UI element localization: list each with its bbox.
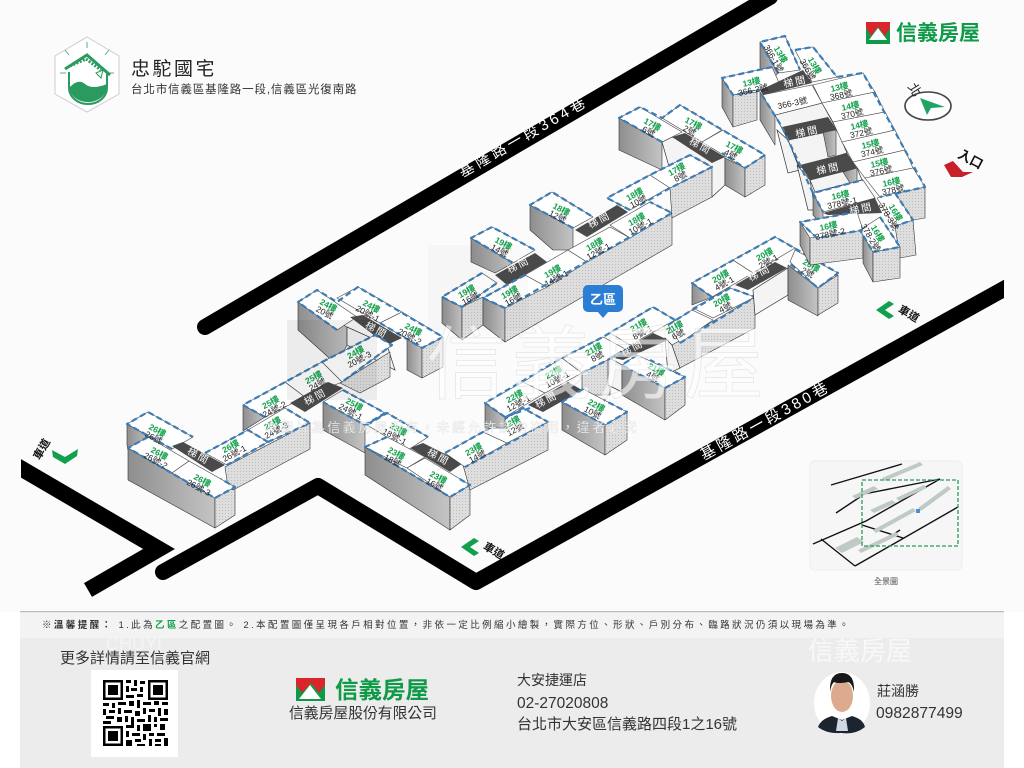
branch details: 台北市大安區信義路四段1之16號 (517, 716, 737, 733)
unit labels: 22樓 (543, 363, 564, 381)
unit labels: 378-2號 (859, 222, 883, 254)
unit labels: 24號-1 (337, 401, 365, 422)
unit labels: 16號 (424, 476, 445, 493)
unit labels: 19樓 (542, 262, 563, 280)
unit labels: 16樓 (882, 175, 902, 189)
stair labels: 梯間 (815, 160, 841, 177)
stair labels: 梯間 (425, 446, 452, 468)
unit labels: 14號-1 (543, 268, 570, 289)
QR code (91, 670, 178, 757)
branch details (517, 672, 737, 733)
project name: 忠駝國宅 (131, 58, 217, 80)
unit labels: 20樓 (711, 291, 732, 309)
stair label: 梯間 (185, 445, 212, 467)
entrance marker 入口 (944, 146, 986, 177)
footer company name: 信義房屋股份有限公司 (289, 705, 437, 722)
watermark (265, 245, 770, 435)
unit labels: 18號-1 (381, 426, 409, 447)
unit labels: 20樓 (801, 257, 822, 274)
unit labels: 15樓 (870, 156, 890, 170)
unit labels: 13樓 (742, 75, 762, 89)
unit labels: 366-3號 (777, 95, 809, 111)
stair labels: 梯間 (533, 389, 560, 411)
unit labels: 4號-1 (713, 274, 736, 293)
road: 基隆路一段364巷: 基隆路一段364巷 (456, 93, 591, 181)
icon: north compass (905, 80, 951, 120)
branch details: 大安捷運店 (517, 672, 587, 688)
unit labels: 14樓 (850, 118, 870, 132)
driveway label east (876, 301, 922, 325)
unit labels: 26號-2 (142, 450, 170, 471)
stair labels: 梯間 (586, 209, 613, 231)
unit labels: 18號 (382, 452, 403, 469)
unit labels: 2號 (799, 265, 816, 280)
unit labels (624, 115, 745, 210)
unit labels: 22樓 (504, 387, 525, 405)
unit labels: 23樓 (386, 445, 407, 462)
stair labels (533, 337, 646, 411)
icon: north compass: 北 (905, 80, 925, 99)
unit labels: 374號 (860, 145, 885, 159)
header project logo (55, 37, 119, 112)
stair label: 梯間 (746, 262, 773, 284)
agent name and phone: 莊涵勝 (877, 683, 919, 699)
footer watermark (106, 634, 912, 666)
building wing: 19 and 18 floors (442, 192, 672, 342)
unit labels: 6號 (670, 327, 687, 342)
unit labels: 368號 (829, 88, 854, 102)
unit labels: 20號-2 (396, 326, 424, 347)
footer brand logo: 信義房屋 (335, 677, 429, 703)
stair labels: 梯間 (794, 123, 820, 140)
unit labels: 2號-1 (757, 252, 780, 271)
minimap caption: 全景圖 (874, 577, 898, 586)
stair label: 梯間 (687, 135, 714, 157)
unit labels: 24樓 (403, 321, 424, 338)
unit labels: 26號-1 (221, 443, 248, 464)
building wing: 22 and 21 floors (485, 288, 755, 455)
unit labels: 21樓 (583, 340, 604, 358)
minimap (810, 461, 962, 586)
unit labels: 20樓 (754, 245, 775, 263)
unit labels: 14號 (467, 448, 488, 465)
stair labels: 梯間 (302, 386, 329, 408)
unit labels: 17樓 (642, 116, 663, 133)
building wing: 25 and 23 floors (243, 362, 548, 530)
unit labels: 378-3號 (877, 201, 901, 233)
building wing: 17 floors (607, 105, 765, 218)
top right brand logo: 信義房屋 (896, 22, 980, 45)
unit labels: 19樓 (493, 235, 514, 252)
unit labels: 4號 (717, 300, 734, 315)
unit labels: 16樓 (887, 202, 905, 223)
unit labels: 20號-3 (346, 349, 373, 370)
unit labels: 366-1號 (762, 43, 786, 75)
unit labels: 26號-3 (185, 477, 213, 498)
agent name and phone (876, 683, 963, 722)
unit labels: 21樓 (664, 318, 685, 336)
stair labels: 梯間 (782, 73, 808, 90)
agent name and phone: 0982877499 (876, 705, 963, 722)
unit labels: 19樓 (499, 283, 520, 301)
unit labels: 24樓 (318, 297, 339, 314)
unit labels: 25樓 (262, 414, 283, 432)
unit labels: 26樓 (220, 437, 241, 455)
stair labels: 梯間 (619, 337, 646, 359)
unit labels: 24號-2 (261, 399, 288, 420)
unit labels: 378號-2 (814, 226, 846, 242)
unit labels: 12號-1 (585, 241, 612, 262)
unit labels: 8號 (672, 169, 689, 184)
unit labels: 372號 (849, 126, 874, 140)
unit labels: 23樓 (388, 421, 409, 438)
unit labels: 13樓 (806, 55, 824, 76)
unit labels: 10號-1 (544, 369, 571, 390)
agent photo (814, 672, 870, 734)
unit labels: 18樓 (551, 201, 572, 218)
unit labels: 12號 (547, 208, 568, 225)
unit labels: 376號 (869, 164, 894, 178)
unit labels: 26樓 (147, 422, 168, 439)
unit labels: 21樓 (628, 316, 649, 334)
stair labels (302, 386, 452, 468)
unit labels: 12號 (505, 421, 526, 438)
unit labels: 4號 (644, 369, 661, 384)
unit labels: 13樓 (772, 44, 790, 65)
unit labels: 20號 (314, 304, 335, 321)
unit labels: 378號 (881, 183, 906, 197)
panel: disclaimer (20, 611, 1004, 638)
unit labels: 25樓 (260, 393, 281, 411)
unit labels: 12號-1 (505, 393, 532, 414)
unit labels: 20號-1 (354, 303, 382, 324)
driveway label west: 車道 (30, 436, 53, 462)
unit labels: 10號 (628, 193, 649, 210)
footer watermark: CHUYI (106, 634, 162, 654)
driveway label south (461, 538, 507, 562)
unit labels: 378號-1 (826, 195, 858, 211)
unit labels (709, 245, 822, 293)
unit labels: 366-2號 (737, 82, 769, 98)
unit labels: 24號-3 (263, 420, 290, 441)
unit labels: 24樓 (361, 298, 382, 315)
unit labels: 16樓 (831, 188, 851, 202)
unit labels: 18樓 (624, 185, 645, 203)
stair labels: 梯間 (505, 254, 532, 276)
stair labels (505, 209, 613, 276)
unit labels (736, 39, 908, 254)
unit labels: 24樓 (345, 343, 366, 361)
watermark: 信義房屋 (426, 320, 770, 409)
road: 基隆路一段364巷 (205, 0, 770, 327)
unit labels: 18樓 (626, 210, 647, 228)
project address: 台北市信義區基隆路一段,信義區光復南路 (131, 82, 357, 96)
unit labels: 26號 (143, 429, 164, 446)
unit labels: 26樓 (192, 472, 213, 489)
unit labels (456, 201, 654, 308)
unit labels: 10號-1 (627, 216, 654, 237)
unit labels: 21樓 (646, 361, 667, 378)
building wing: 26 and 25 floors (127, 405, 310, 528)
zone marker 乙區 (583, 285, 623, 318)
stair labels: 梯間 (848, 200, 874, 217)
unit labels: 16樓 (819, 219, 839, 233)
footer website prompt: 更多詳情請至信義官網 (60, 649, 210, 667)
driveway label west (30, 436, 78, 464)
road: 基隆路一段380巷: 基隆路一段380巷 (698, 378, 834, 464)
building wing: 20 floors (692, 237, 838, 316)
unit labels: 14號 (489, 242, 510, 259)
stair label: 梯間 (363, 319, 390, 341)
map background (0, 0, 1024, 612)
panel: disclaimer: ※溫馨提醒： 1.此為乙區之配置圖。 2.本配置圖僅呈現各戶相對位置，非依一定比例縮小繪製，實際方位、形狀、戶別分布、臨路狀況仍須以現場為準。 (42, 619, 851, 631)
unit labels: 13樓 (830, 80, 850, 94)
unit labels: 2號 (681, 123, 698, 138)
unit labels: 17樓 (666, 160, 687, 178)
unit labels: 23樓 (463, 440, 484, 458)
unit labels: 8號 (589, 349, 606, 364)
unit labels: 366號 (798, 57, 818, 82)
building wing: 24 floors (298, 287, 443, 393)
watermark: 本圖片為信義房屋所有，未經允許請勿盜用，違者必究 (265, 420, 639, 435)
zone marker 乙區: 乙區 (590, 292, 616, 307)
unit labels: 17樓 (683, 115, 704, 132)
driveway label south: 車道 (481, 539, 507, 562)
unit labels (501, 291, 736, 421)
unit labels: 19樓 (456, 282, 477, 300)
unit labels: 26樓 (149, 445, 170, 462)
panel: footer (20, 634, 1004, 768)
driveway label east: 車道 (896, 302, 922, 325)
unit labels: 20樓 (710, 267, 731, 285)
stair labels (782, 73, 874, 217)
branch details: 02-27020808 (517, 695, 608, 712)
unit labels (142, 413, 290, 498)
road: west driveway (10, 462, 159, 590)
unit labels: 23樓 (428, 469, 449, 486)
unit labels: 14樓 (841, 99, 861, 113)
unit labels: 16號 (503, 291, 524, 308)
unit labels: 16號 (460, 290, 481, 307)
entrance marker 入口: 入口 (956, 146, 986, 172)
unit labels: 10號 (582, 404, 603, 421)
unit labels (257, 368, 526, 493)
unit labels: 16樓 (869, 223, 887, 244)
building cluster: northeast 13 to 16 floors (722, 36, 925, 282)
unit labels: 370號 (840, 107, 865, 121)
unit labels: 25樓 (303, 368, 324, 386)
unit labels (314, 296, 427, 370)
unit labels: 18樓 (584, 235, 605, 253)
unit labels: 24號 (307, 376, 328, 393)
unit labels: 22樓 (586, 397, 607, 414)
unit labels: 8號-1 (631, 323, 654, 342)
unit labels: 22樓 (501, 413, 522, 431)
footer watermark: 信義房屋 (808, 636, 912, 666)
unit labels: 4號 (722, 147, 739, 162)
unit labels: 6號 (640, 124, 657, 139)
unit labels: 25樓 (344, 396, 365, 413)
unit labels: 17樓 (724, 139, 745, 156)
unit labels: 15樓 (861, 137, 881, 151)
